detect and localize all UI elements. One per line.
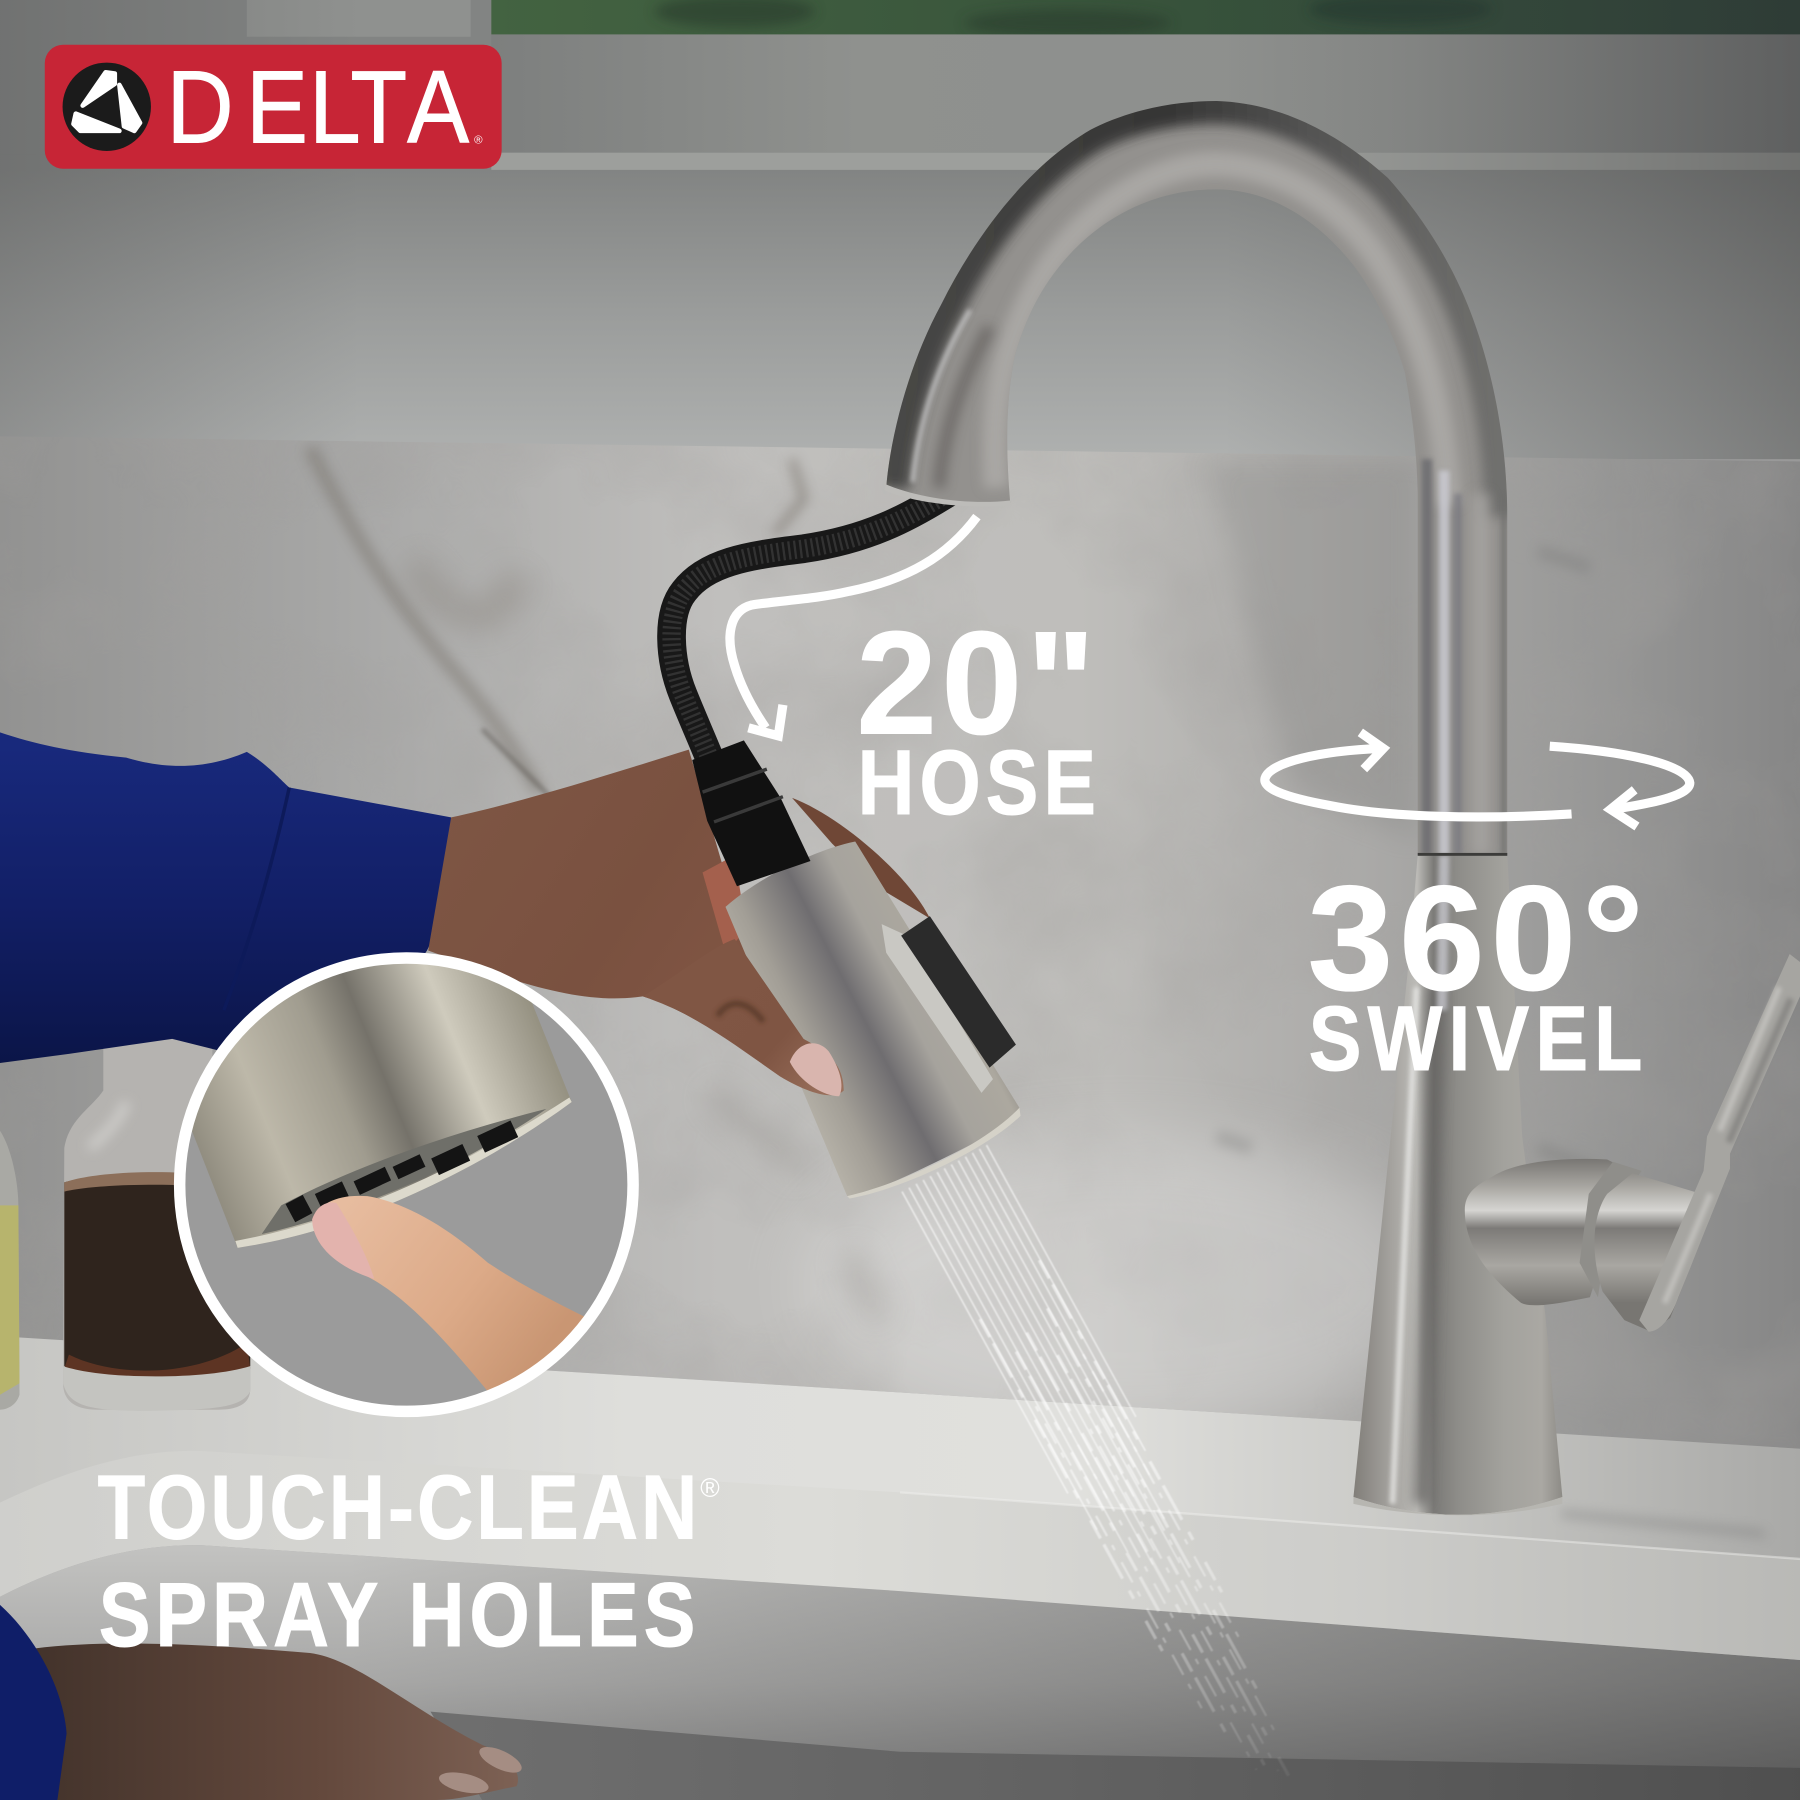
lever	[1639, 954, 1800, 1332]
inset fingernail	[312, 1202, 374, 1279]
background: window and upper wall	[0, 0, 1800, 459]
sink basin	[0, 1545, 1800, 1800]
inset finger	[312, 1196, 591, 1401]
thumb over sprayer	[643, 939, 844, 1096]
lower-left hand	[34, 1643, 525, 1800]
faucet spout	[884, 101, 1507, 856]
palm behind sprayer	[703, 855, 746, 953]
marble backsplash	[0, 436, 1800, 1458]
hose word: HOSE	[858, 732, 1101, 834]
oil bottle	[0, 1131, 20, 1410]
360 degrees value: 360°	[1308, 855, 1650, 1022]
wordmark: DELTA	[166, 49, 470, 164]
Delta logo badge	[45, 45, 502, 169]
touch-clean label	[98, 1457, 720, 1666]
inset spray holes	[286, 1121, 518, 1222]
water spray	[902, 1145, 1324, 1800]
spray head button	[882, 916, 1016, 1093]
lower-left sleeve	[0, 1605, 67, 1800]
faucet handle	[1465, 954, 1800, 1332]
fingernail	[790, 1043, 841, 1096]
inset: touch-clean spray holes	[174, 952, 639, 1418]
touch-clean line: TOUCH-CLEAN	[98, 1457, 700, 1558]
faucet base body	[1353, 855, 1562, 1515]
registered mark: ®	[700, 1473, 720, 1503]
swivel word: SWIVEL	[1309, 988, 1648, 1090]
countertop	[0, 1336, 1800, 1660]
spray holes line: SPRAY HOLES	[99, 1565, 700, 1666]
fingers behind sprayer	[792, 798, 930, 918]
20 inch value: 20"	[856, 602, 1100, 766]
inset spray head	[192, 964, 572, 1246]
spray head	[726, 841, 1021, 1198]
registered mark: ®	[474, 134, 483, 146]
swivel arrows	[1265, 732, 1690, 827]
hose length label	[856, 602, 1101, 834]
hose arrow	[730, 517, 977, 736]
hand holding sprayer	[428, 750, 804, 1077]
glass jar	[63, 1039, 250, 1411]
swivel label	[1308, 855, 1650, 1090]
hose connector	[692, 740, 810, 886]
sleeve	[0, 732, 451, 1063]
logo emblem	[63, 63, 151, 151]
braided hose	[672, 491, 951, 763]
